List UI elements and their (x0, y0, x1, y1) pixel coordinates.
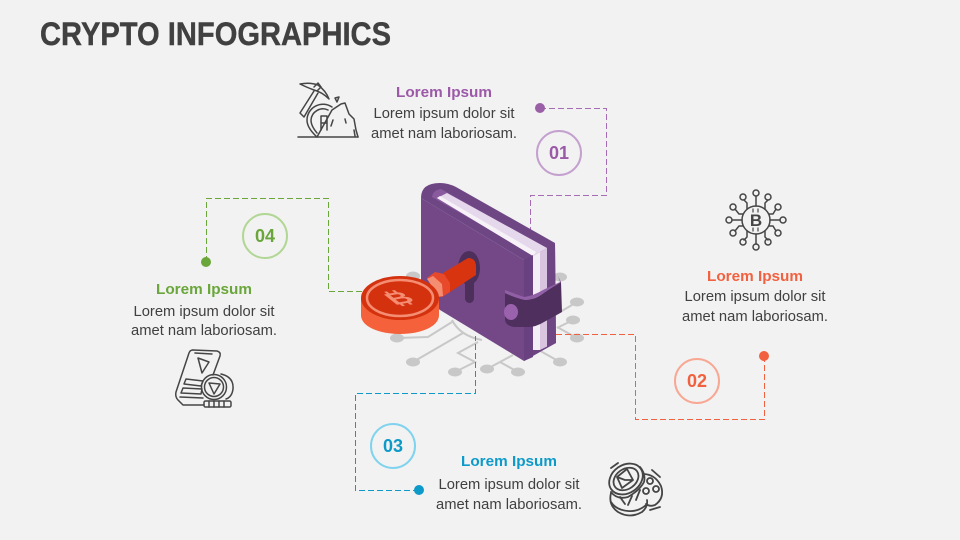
heading 03: Lorem Ipsum (461, 453, 557, 470)
heading 04: Lorem Ipsum (156, 281, 252, 298)
text 01: Lorem ipsum dolor sit (374, 106, 514, 122)
number badge 01: 01 (549, 143, 569, 163)
text 03: Lorem ipsum dolor sit (438, 477, 580, 493)
text 03 (436, 477, 582, 513)
number badge 01 (537, 131, 581, 175)
number badge 03 (371, 424, 415, 468)
wallet back and side (524, 243, 556, 361)
strap button (504, 304, 518, 320)
number badge 02 (675, 359, 719, 403)
heading 02: Lorem Ipsum (707, 268, 803, 285)
key shaft (443, 258, 476, 292)
title: CRYPTO INFOGRAPHICS (40, 16, 391, 52)
text 03: amet nam laboriosam. (436, 497, 582, 513)
number badge 03: 03 (383, 436, 403, 456)
key with bitcoin head (361, 258, 476, 334)
icon: mining pickaxe and coin (298, 83, 358, 137)
block 02 (682, 268, 828, 325)
text 02: amet nam laboriosam. (682, 309, 828, 325)
icon: bitcoin network: B (750, 211, 762, 230)
connector 01 (530, 103, 606, 245)
text 02 (682, 289, 828, 325)
icon: bitcoin network (726, 190, 786, 250)
wallet strap (505, 282, 562, 327)
wallet pages top (432, 189, 548, 256)
connector 04 (201, 198, 368, 292)
block 01 (371, 84, 517, 142)
connector 02 (555, 334, 769, 420)
text 04: amet nam laboriosam. (131, 323, 277, 339)
number badge 04: 04 (255, 226, 275, 246)
wallet top face (421, 183, 555, 260)
block 04 (131, 281, 277, 339)
wallet (421, 183, 562, 361)
number badge 04 (243, 214, 287, 258)
text 01: amet nam laboriosam. (371, 126, 517, 142)
key disc top (361, 276, 439, 320)
keyhole (458, 251, 480, 303)
wallet front cover (421, 198, 524, 361)
bitcoin symbol: B (378, 288, 421, 308)
key collar (427, 272, 450, 297)
connector 03 (356, 336, 476, 495)
circuit board (390, 272, 584, 376)
heading 01: Lorem Ipsum (396, 84, 492, 101)
key disc side (361, 298, 439, 334)
text 01 (371, 106, 517, 142)
block 03 (436, 453, 582, 513)
wallet pages side (533, 252, 540, 350)
icon: tron wallet phone and coins (176, 350, 233, 407)
text 04: Lorem ipsum dolor sit (134, 304, 274, 320)
text 02: Lorem ipsum dolor sit (684, 289, 826, 305)
number badge 02: 02 (687, 371, 707, 391)
text 04 (131, 304, 277, 339)
icon: ethereum and ripple coins (603, 457, 662, 516)
